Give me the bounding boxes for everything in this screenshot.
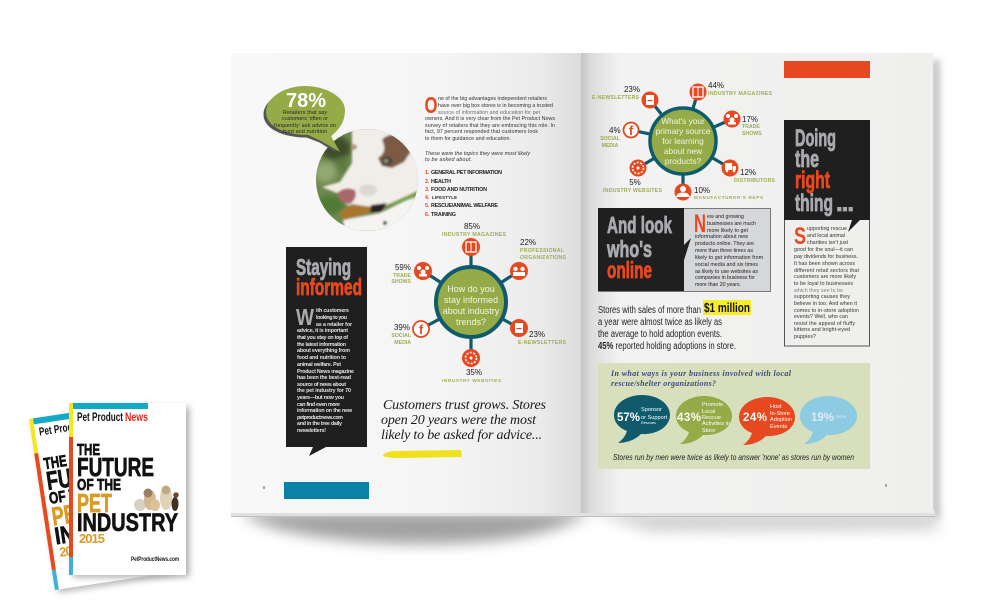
panel: and look who's online: as likely to use websites as bbox=[695, 269, 758, 275]
topic list: 6. bbox=[425, 212, 430, 218]
panel: and look who's online: likely to get information from bbox=[695, 255, 764, 261]
heading: staying informed: Staying bbox=[296, 254, 351, 280]
topic list: 2. bbox=[425, 179, 430, 185]
bubble: 43% promote: Rescue bbox=[702, 415, 721, 421]
bubble: 19% none: 19% bbox=[811, 412, 834, 424]
panel heading bbox=[610, 369, 792, 388]
icon: industry websites bbox=[630, 160, 646, 176]
panel: and look who's online: companies in business for bbox=[695, 275, 755, 281]
intro article text: owners. And it is very clear from the Pet Product News bbox=[425, 116, 555, 122]
back magazine cover: INDUSTRY bbox=[53, 508, 157, 550]
cover title: FUTURE bbox=[77, 452, 154, 482]
panel: doing the right thing: kittens and bright-eyed bbox=[794, 327, 850, 333]
label: 4% social media: 4% bbox=[609, 126, 621, 135]
text block: stores with sales of more than $1 million: Stores with sales of more than bbox=[598, 305, 701, 316]
panel: staying informed: newsletters! bbox=[297, 428, 326, 434]
label: 44% industry magazines: 44% bbox=[708, 81, 724, 90]
topic list: TRAINING bbox=[431, 212, 456, 218]
icon: social media bbox=[413, 321, 429, 337]
panel: staying informed: the pet industry for 70 bbox=[297, 388, 351, 394]
panel: doing the right thing: good for the soul—it can bbox=[794, 247, 853, 253]
masthead: News bbox=[125, 410, 148, 424]
panel: doing the right thing: different retail sectors that bbox=[794, 268, 860, 274]
bubble: 24% host: 24% bbox=[743, 412, 767, 424]
heading: and look who's online: who's bbox=[606, 236, 652, 262]
hub diagram: primary source for new products: for learning bbox=[662, 136, 704, 146]
panel: doing the right thing: supporting causes they bbox=[794, 294, 850, 300]
bubble: 43% promote bbox=[676, 396, 732, 444]
label: 35% industry websites: INDUSTRY WEBSITES bbox=[442, 378, 501, 383]
label: 17% trade shows: TRADE bbox=[742, 124, 760, 130]
panel: and look who's online: businesses are much bbox=[707, 221, 756, 227]
topic list: GENERAL PET INFORMATION bbox=[431, 170, 502, 176]
hub diagram: how do you stay informed: How do you bbox=[447, 284, 495, 294]
panel: staying informed: petproductnews.com bbox=[297, 415, 343, 421]
label: 4% social media bbox=[600, 126, 621, 149]
label: 22% professional organizations: PROFESSIONAL bbox=[520, 248, 565, 254]
label: 17% trade shows: 17% bbox=[742, 115, 758, 124]
cover title: PET bbox=[77, 488, 112, 518]
panel: doing the right thing: events? Well, who can bbox=[794, 314, 848, 320]
bubble: 19% none: None bbox=[836, 414, 847, 419]
icon: magazines bbox=[690, 84, 706, 100]
bubble: 43% promote: Promote bbox=[702, 402, 723, 408]
panel: and look who's online: products online. They are bbox=[695, 241, 754, 247]
label: 39% social media: 39% bbox=[394, 323, 410, 332]
intro article text: source of information and education for pet bbox=[438, 110, 541, 116]
back magazine cover: THE bbox=[43, 453, 68, 473]
bubble: 19% none bbox=[800, 396, 857, 444]
bubble: 57% sponsor: or Support bbox=[641, 415, 668, 421]
drop cap O: O bbox=[424, 92, 438, 118]
heading: doing the right thing: thing bbox=[795, 190, 833, 217]
hub diagram: how do you stay informed bbox=[391, 222, 567, 383]
masthead: Pet Product bbox=[77, 410, 123, 424]
label: 10% manufacturer's reps: 10% bbox=[694, 186, 710, 195]
heading: and look who's online: online bbox=[607, 257, 652, 283]
panel: and look who's online: more than three times as bbox=[695, 248, 753, 254]
label: 12% distributors: DISTRIBUTORS bbox=[734, 178, 776, 184]
cover title bbox=[77, 442, 178, 546]
label: 23% e-newsletters bbox=[518, 330, 567, 346]
footnote: Stores run by men were twice as likely to answer 'none' as stores run by women bbox=[613, 452, 854, 462]
topic list bbox=[425, 170, 502, 218]
hub diagram: primary source for new products: about new bbox=[664, 146, 703, 156]
bubble: 57% sponsor bbox=[614, 395, 670, 443]
label: 85% industry magazines: INDUSTRY MAGAZINES bbox=[442, 232, 507, 238]
panel: doing the right thing: pay dividends for business. bbox=[794, 254, 858, 260]
label: 17% trade shows: SHOWS bbox=[742, 131, 762, 137]
panel: doing the right thing: to be loyal to businesses bbox=[794, 281, 853, 287]
bubble: 78% of retailers: 78% bbox=[286, 90, 326, 112]
label: 10% manufacturer's reps bbox=[694, 186, 763, 200]
panel: doing the right thing: comes to in-store adoption bbox=[794, 308, 859, 314]
panel: and look who's online bbox=[598, 208, 770, 292]
text block: stores with sales of more than $1 million: a year were almost twice as likely as bbox=[598, 317, 722, 328]
panel: staying informed bbox=[286, 247, 367, 456]
panel: doing the right thing: which they see to be bbox=[794, 288, 843, 294]
bubble: 57% sponsor: 57% bbox=[617, 412, 640, 424]
panel: staying informed: food and nutrition to bbox=[297, 355, 347, 361]
back magazine cover: PET bbox=[50, 497, 89, 532]
bubble: 57% sponsor: Sponsor bbox=[641, 407, 662, 413]
intro article text: to be asked about. bbox=[425, 157, 472, 163]
panel: staying informed: that you stay on top of bbox=[297, 335, 348, 341]
label: 23% e-newsletters: 23% bbox=[529, 330, 545, 339]
label: 5% industry websites: INDUSTRY WEBSITES bbox=[603, 188, 663, 194]
bubble: 24% host: Adoption bbox=[770, 417, 792, 423]
panel heading: In what ways is your business involved with local bbox=[610, 369, 792, 378]
label: 35% industry websites: 35% bbox=[466, 368, 482, 377]
intro article text: These were the topics they were most likely bbox=[425, 151, 530, 157]
label: 59% trade shows bbox=[391, 263, 412, 285]
icon: social media: f bbox=[419, 322, 424, 337]
panel: staying informed: W bbox=[296, 304, 314, 330]
panel: staying informed: animal welfare. Pet bbox=[297, 362, 341, 368]
hub diagram: how do you stay informed: about industry bbox=[443, 306, 500, 316]
pull quote: customers trust grows bbox=[381, 398, 547, 443]
bubble: 43% promote: 43% bbox=[677, 412, 701, 424]
panel: doing the right thing: resist the appeal of fluffy bbox=[794, 321, 855, 327]
label: 39% social media: SOCIAL bbox=[391, 333, 412, 339]
panel: doing the right thing: believe in too. And when it bbox=[794, 301, 858, 307]
blue tab bbox=[284, 482, 369, 499]
hub diagram: primary source for new products: primary source bbox=[656, 126, 711, 136]
label: 23% e-newsletters: E-NEWSLETTERS bbox=[518, 340, 567, 346]
panel: and look who's online: more likely to get bbox=[707, 228, 749, 234]
panel: staying informed: looking to you bbox=[316, 315, 347, 321]
icon: trade shows bbox=[724, 110, 740, 128]
panel: doing the right thing: customers are more likely bbox=[794, 274, 856, 280]
label: 5% industry websites bbox=[603, 178, 663, 194]
heading: doing the right thing bbox=[795, 125, 854, 217]
icon: manufacturer's reps bbox=[674, 184, 692, 200]
label: 59% trade shows: 59% bbox=[395, 263, 411, 272]
label: 35% industry websites bbox=[442, 368, 501, 383]
magazine spread bbox=[231, 53, 940, 544]
heading: and look who's online: And look bbox=[607, 212, 672, 238]
panel: staying informed: has been the best-read bbox=[297, 375, 351, 381]
panel: staying informed: advice, it is important bbox=[297, 328, 348, 334]
hub diagram: how do you stay informed: stay informed bbox=[444, 295, 498, 305]
intro article text: to them for guidance and education. bbox=[425, 136, 511, 142]
intro article text: survey of retailers that they are embracing this role. In bbox=[425, 123, 555, 129]
panel: and look who's online: ew and growing bbox=[707, 214, 744, 220]
panel: staying informed: source of news about bbox=[297, 382, 346, 388]
label: 39% social media bbox=[391, 323, 412, 346]
label: 44% industry magazines: INDUSTRY MAGAZINES bbox=[708, 91, 773, 97]
label: 12% distributors: 12% bbox=[740, 168, 756, 177]
panel: staying informed: ith customers bbox=[316, 308, 349, 314]
intro article text: have over big box stores is in becoming a trusted bbox=[438, 103, 553, 109]
label: 22% professional organizations: ORGANIZATIONS bbox=[520, 255, 567, 261]
back magazine cover: 2015 bbox=[58, 541, 86, 560]
panel: staying informed: as a retailer for bbox=[316, 322, 352, 328]
panel: staying informed: the latest information bbox=[297, 342, 346, 348]
bubble: 78% of retailers: customers 'often or bbox=[282, 116, 328, 122]
bubble: 43% promote: Activities in bbox=[702, 421, 730, 427]
label: 23% e-newsletters: E-NEWSLETTERS bbox=[592, 95, 640, 101]
icon: distributors truck bbox=[722, 160, 738, 176]
page number 8: 8 bbox=[263, 485, 266, 490]
bubble: 78% of retailers: Retailers that say bbox=[283, 110, 327, 116]
label: 59% trade shows: TRADE bbox=[393, 273, 412, 279]
pull quote: customers trust grows: open 20 years were the most bbox=[381, 413, 537, 428]
photo: dog in circle bbox=[314, 128, 421, 232]
hub diagram: primary source for new products bbox=[592, 81, 776, 200]
panel: staying informed: information on the new bbox=[297, 408, 353, 414]
panel: rescue/shelter involvement bbox=[598, 363, 870, 469]
panel: staying informed: can find even more bbox=[297, 402, 340, 408]
label: 22% professional organizations: 22% bbox=[520, 238, 536, 247]
cover url: PetProductNews.com bbox=[131, 556, 179, 563]
topic list: HEALTH bbox=[431, 179, 451, 185]
label: 59% trade shows: SHOWS bbox=[391, 279, 412, 285]
label: 39% social media: MEDIA bbox=[394, 340, 411, 346]
panel: doing the right thing: and local animal bbox=[807, 233, 845, 239]
text block: stores with sales of more than $1 million: 45% reported holding adoptions in store. bbox=[598, 341, 736, 352]
back magazine cover: Pet Product bbox=[38, 420, 86, 439]
front magazine cover bbox=[69, 403, 189, 577]
heading: doing the right thing: the bbox=[795, 146, 819, 173]
bubble: 78% of retailers: frequently' ask advice on bbox=[274, 123, 336, 129]
bubble: 43% promote: Store bbox=[702, 428, 715, 434]
panel: doing the right thing: charities isn't just bbox=[807, 240, 849, 246]
back magazine cover: FUTURE bbox=[44, 455, 125, 496]
bubble: 24% host: In-Store bbox=[770, 411, 790, 417]
panel: staying informed: about everything from bbox=[297, 348, 350, 354]
icon: magazines bbox=[462, 238, 480, 256]
pull quote: customers trust grows: Customers trust grows. Stores bbox=[383, 398, 547, 413]
red tab bbox=[784, 61, 870, 78]
cover title: INDUSTRY bbox=[77, 509, 178, 537]
topic list: 4. bbox=[425, 195, 430, 201]
label: 85% industry magazines: 85% bbox=[464, 222, 480, 231]
hub diagram: primary source for new products: What's your bbox=[661, 116, 705, 126]
label: 12% distributors bbox=[734, 168, 776, 184]
intro article text: ne of the big advantages independent retailers bbox=[438, 96, 547, 102]
icon: industry websites bbox=[462, 349, 480, 367]
cover title: OF THE bbox=[77, 477, 121, 494]
bubble: 24% host bbox=[739, 397, 795, 445]
bubble: 24% host: Events bbox=[770, 424, 787, 430]
bubble: 78% of retailers bbox=[264, 86, 345, 154]
intro article text: fact, 97 percent responded that customers look bbox=[425, 129, 538, 135]
label: 5% industry websites: 5% bbox=[629, 178, 641, 187]
panel: doing the right thing: S bbox=[794, 223, 806, 250]
text block: stores with sales of more than $1 million: $1 million bbox=[704, 300, 750, 315]
bubble: 24% host: Host bbox=[770, 404, 782, 410]
topic list: 1. bbox=[425, 170, 430, 176]
heading: staying informed bbox=[296, 254, 362, 300]
panel: and look who's online: social media and six times bbox=[695, 262, 758, 268]
bubble: 78% of retailers: food and nutrition bbox=[283, 129, 327, 135]
icon: e-newsletters bbox=[642, 92, 658, 108]
icon: trade shows bbox=[414, 262, 432, 280]
cover title: 2015 bbox=[79, 531, 105, 546]
cover title: THE bbox=[77, 442, 100, 459]
bubble: 57% sponsor: Rescues bbox=[641, 421, 656, 425]
label: 44% industry magazines bbox=[708, 81, 773, 97]
illustration: pets group bbox=[134, 486, 179, 511]
label: 85% industry magazines bbox=[442, 222, 507, 238]
heading: doing the right thing: ... bbox=[836, 190, 854, 217]
panel: staying informed: and in the tree daily bbox=[297, 421, 342, 427]
icon: social media: f bbox=[629, 123, 634, 138]
panel: and look who's online: information about new bbox=[695, 234, 748, 240]
back magazine cover bbox=[29, 401, 175, 593]
intro article text bbox=[424, 92, 555, 163]
panel: doing the right thing: It has been shown across bbox=[794, 261, 855, 267]
highlight: $1 million bbox=[703, 300, 751, 315]
hub diagram: primary source for new products: products? bbox=[665, 156, 702, 166]
hub diagram: how do you stay informed: trends? bbox=[456, 317, 486, 327]
panel heading: rescue/shelter organizations? bbox=[611, 379, 716, 388]
panel: doing the right thing bbox=[784, 120, 870, 346]
bubble: 43% promote: Local bbox=[702, 409, 715, 415]
heading: staying informed: informed bbox=[296, 274, 362, 300]
panel: and look who's online: more than 20 years. bbox=[695, 282, 741, 288]
heading: doing the right thing: right bbox=[795, 167, 830, 194]
topic list: FOOD AND NUTRITION bbox=[431, 187, 487, 193]
panel: staying informed: years—but now you bbox=[297, 395, 344, 401]
page number 9: 9 bbox=[885, 483, 888, 488]
label: 23% e-newsletters: 23% bbox=[624, 85, 640, 94]
yellow highlight stroke bbox=[383, 450, 462, 458]
panel: doing the right thing: upporting rescue bbox=[807, 226, 847, 232]
heading: doing the right thing: Doing bbox=[795, 125, 836, 152]
label: 10% manufacturer's reps: MANUFACTURER'S REPS bbox=[694, 195, 763, 200]
icon: social media bbox=[624, 122, 638, 138]
icon: professional organizations bbox=[510, 262, 528, 280]
text block: stores with sales of more than $1 million: the average to hold adoption events. bbox=[598, 329, 722, 340]
topic list: 3. bbox=[425, 187, 430, 193]
topic list: LIFESTYLE bbox=[432, 195, 457, 200]
label: 4% social media: SOCIAL bbox=[600, 136, 621, 142]
topic list: RESCUE/ANIMAL WELFARE bbox=[431, 203, 498, 209]
label: 17% trade shows bbox=[742, 115, 762, 137]
label: 23% e-newsletters bbox=[592, 85, 640, 101]
topic list: 5. bbox=[425, 203, 430, 209]
icon: e-newsletters bbox=[510, 319, 528, 337]
panel: and look who's online: N bbox=[694, 210, 706, 238]
heading: and look who's online bbox=[606, 212, 672, 283]
label: 22% professional organizations bbox=[520, 238, 567, 261]
panel: staying informed: Product News magazine bbox=[297, 369, 354, 375]
panel: doing the right thing: puppies? bbox=[794, 334, 816, 340]
back magazine cover: OF THE bbox=[48, 484, 94, 508]
text block: stores with sales of more than $1 million bbox=[598, 300, 751, 352]
label: 4% social media: MEDIA bbox=[602, 143, 619, 149]
pull quote: customers trust grows: likely to be asked for advice... bbox=[381, 428, 542, 443]
